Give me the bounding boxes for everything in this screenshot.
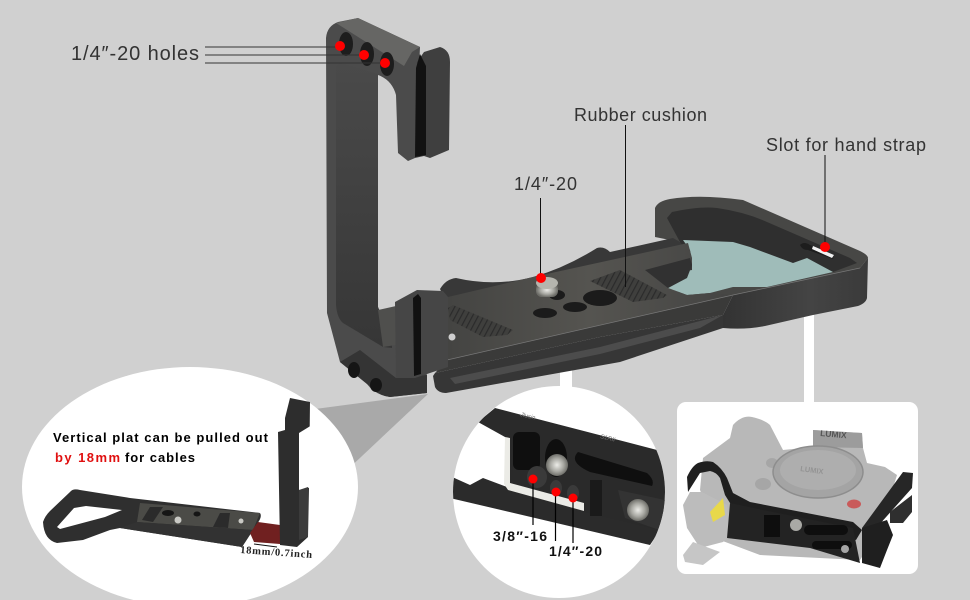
- callout: top 1/4-20 holes: [71, 41, 390, 68]
- inset text: for cables: [125, 450, 195, 465]
- callout: rubber cushion: Rubber cushion: [574, 105, 707, 125]
- engraved marks: [519, 412, 616, 444]
- bottom block cap face: [395, 290, 448, 378]
- lens release button: [847, 500, 861, 508]
- dimension arrow: [254, 544, 277, 547]
- small bracket grip opening: [57, 506, 122, 529]
- labels: [493, 528, 602, 559]
- callout: bottom screw 1/4-20: 1/4″-20: [514, 174, 577, 194]
- engraved marks: S1RII: [600, 434, 616, 444]
- teal screen: [668, 240, 833, 295]
- leader lines: [533, 479, 573, 543]
- callout: slot for hand strap: Slot for hand strap: [766, 135, 926, 155]
- engraved marks: Jlusin: [519, 412, 536, 422]
- rail: [433, 315, 723, 393]
- small bracket pads: [142, 507, 230, 528]
- upright silhouette: [326, 18, 427, 397]
- inset text: Vertical plat can be pulled out: [53, 430, 269, 445]
- bracket upright: [862, 472, 913, 528]
- small bracket front band: [120, 522, 253, 547]
- base plate back lip: [440, 238, 692, 310]
- bottom notches: [348, 362, 382, 392]
- small bracket holes: [162, 510, 244, 524]
- grip arc: [687, 461, 862, 540]
- top cap channel: [415, 54, 426, 157]
- viewfinder block: [813, 430, 863, 448]
- panel: left inset ellipse: [22, 367, 358, 600]
- steel strip: [504, 437, 584, 511]
- top arm cap: [415, 47, 450, 158]
- body cap logo: LUMIX: [800, 464, 824, 476]
- inset text: [53, 430, 269, 465]
- camera foot ghost: [683, 542, 720, 565]
- dimension label: 18mm/0.7inch: [240, 545, 313, 561]
- dial buttons: [755, 458, 778, 490]
- side slot: [590, 480, 602, 516]
- upright inner face: [336, 63, 392, 348]
- connector: grey wedge to left inset: [300, 394, 428, 472]
- connector: white stems to insets: [560, 315, 814, 405]
- battery ghost: [683, 492, 724, 546]
- top threaded holes: [339, 32, 394, 76]
- camera brand: LUMIX: [820, 428, 847, 440]
- plate edge highlight: [447, 268, 860, 360]
- red extension: [250, 522, 280, 544]
- small upright: [278, 398, 310, 547]
- camera body ghost: [700, 417, 897, 560]
- hand strap slot: [800, 243, 834, 259]
- base plate front edge: [435, 295, 733, 373]
- bracket slots: [764, 515, 852, 553]
- labels: 3/8″-16: [493, 528, 547, 544]
- grip loop rim: [655, 197, 868, 300]
- label: 1/4″-20 holes: [71, 43, 199, 65]
- plate underside: [478, 408, 667, 540]
- corner floor: [378, 306, 396, 347]
- battery label: [710, 498, 725, 522]
- bracket base: [727, 503, 860, 563]
- lower arm: [450, 476, 660, 545]
- threaded holes: [527, 466, 579, 501]
- lens mount: [773, 446, 863, 498]
- panel: middle inset circle: [450, 386, 667, 598]
- bottom block: [862, 520, 893, 568]
- rubber pad right: [590, 270, 667, 302]
- rubber pad left: [448, 305, 513, 337]
- main product: L bracket: [326, 18, 868, 397]
- small upright opening: [299, 425, 312, 490]
- labels: 1/4″-20: [549, 543, 602, 559]
- inset text: by 18mm: [55, 450, 120, 465]
- callout: bottom screw 1/4-20: [514, 174, 577, 283]
- side screw block: [618, 490, 665, 532]
- rail groove: [450, 315, 723, 384]
- callout: slot for hand strap: [766, 135, 926, 252]
- bottom cap channel: [413, 294, 421, 376]
- plate notch: [645, 258, 692, 288]
- base plate top surface: [447, 243, 733, 360]
- grip interior: [667, 208, 857, 295]
- small bracket base: [43, 489, 261, 547]
- grip outer side: [723, 258, 868, 329]
- red dots: [528, 474, 578, 502]
- small rivet: [448, 334, 456, 340]
- keyhole: [545, 439, 567, 477]
- top slot left: [513, 432, 540, 470]
- side screw: [627, 499, 649, 521]
- round screw: [546, 454, 568, 476]
- upright arm: [890, 495, 912, 523]
- bottom block dark: [340, 350, 427, 397]
- screw: [536, 277, 558, 297]
- small bracket surface: [137, 503, 260, 530]
- upright top bevel: [336, 18, 420, 66]
- small arm: [299, 487, 308, 540]
- long slot: [575, 452, 653, 486]
- mounting holes: [533, 290, 617, 318]
- panel: camera photo card: [677, 402, 918, 574]
